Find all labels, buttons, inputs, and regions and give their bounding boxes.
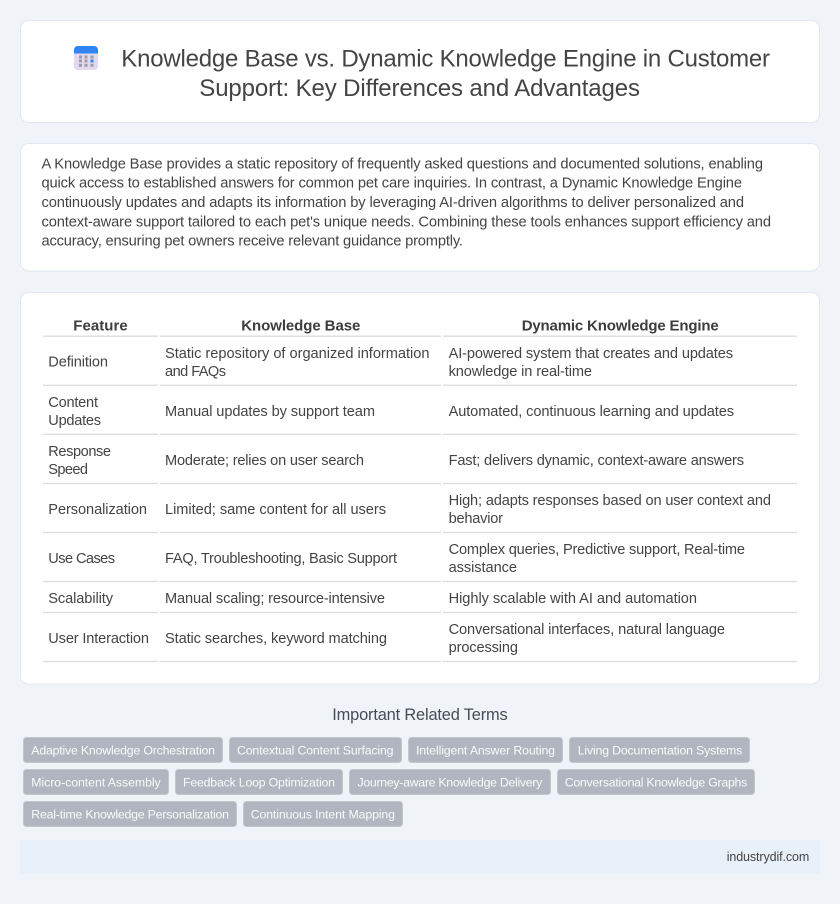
row: response speed: Moderate; relies on user search xyxy=(165,453,364,469)
chip: journey-aware knowledge delivery xyxy=(350,770,550,794)
chip: contextual content surfacing xyxy=(230,738,402,762)
panel: introduction text: context-aware support tailored to each pet's unique needs. Combining these tools enhances support efficiency and xyxy=(42,214,771,230)
title xyxy=(121,46,770,102)
row: personalization: High; adapts responses based on user context and xyxy=(449,493,771,509)
heading: important related terms: Important Related Terms xyxy=(332,706,508,724)
row: user interaction: processing xyxy=(449,640,518,656)
row: user interaction: User Interaction xyxy=(48,631,149,647)
row: use cases: assistance xyxy=(449,560,517,576)
row: content updates: Automated, continuous learning and updates xyxy=(449,404,734,420)
row: definition: and FAQs xyxy=(165,364,226,380)
table header: Dynamic Knowledge Engine xyxy=(522,318,719,335)
panel: introduction text: accuracy, ensuring pet owners receive relevant guidance promptly. xyxy=(42,234,463,250)
chip: real-time knowledge personalization xyxy=(24,802,236,826)
panel: introduction text: continuously updates and adapts its information by leveraging AI-driven algorithms to deliver personalized and xyxy=(42,195,744,211)
row: definition: knowledge in real-time xyxy=(449,364,592,380)
row: user interaction: Static searches, keyword matching xyxy=(165,631,387,647)
row: use cases: Use Cases xyxy=(48,551,115,567)
row: scalability xyxy=(43,591,797,613)
chip: continuous intent mapping: Continuous Intent Mapping xyxy=(251,807,395,821)
icon: calendar xyxy=(74,46,98,70)
chip: conversational knowledge graphs xyxy=(558,770,754,794)
chip: real-time knowledge personalization: Real-time Knowledge Personalization xyxy=(31,807,229,821)
row: scalability: Highly scalable with AI and automation xyxy=(449,591,697,607)
table header: Feature xyxy=(73,318,128,335)
row: content updates: Updates xyxy=(48,413,101,429)
row: personalization: Limited; same content for all users xyxy=(165,502,386,518)
chip: journey-aware knowledge delivery: Journey-aware Knowledge Delivery xyxy=(358,775,543,789)
chip: micro-content assembly xyxy=(24,770,168,794)
row: response speed: Speed xyxy=(48,462,88,478)
chip: living documentation systems xyxy=(570,738,750,762)
row: personalization: behavior xyxy=(449,511,503,527)
chip: intelligent answer routing xyxy=(408,738,562,762)
row: content updates: Manual updates by support team xyxy=(165,404,375,420)
row: personalization xyxy=(43,493,797,533)
title: Support: Key Differences and Advantages xyxy=(199,75,640,102)
row: definition: Definition xyxy=(48,355,108,371)
row: user interaction: Conversational interfaces, natural language xyxy=(449,622,725,638)
panel: introduction text: A Knowledge Base provides a static repository of frequently asked questions and documented solutions, enabling xyxy=(42,156,763,172)
chip: living documentation systems: Living Documentation Systems xyxy=(578,743,742,757)
panel: introduction text xyxy=(20,144,820,271)
row: user interaction xyxy=(43,622,797,662)
chip: intelligent answer routing: Intelligent Answer Routing xyxy=(416,743,555,757)
row: definition: AI-powered system that creates and updates xyxy=(449,346,733,362)
row: content updates: Content xyxy=(48,395,98,411)
row: response speed: Fast; delivers dynamic, context-aware answers xyxy=(449,453,744,469)
chip: contextual content surfacing: Contextual Content Surfacing xyxy=(237,743,394,757)
title: Knowledge Base vs. Dynamic Knowledge Engine in Customer xyxy=(121,46,770,73)
row: use cases: FAQ, Troubleshooting, Basic Support xyxy=(165,551,397,567)
chip: continuous intent mapping xyxy=(244,802,402,826)
chip: micro-content assembly: Micro-content Assembly xyxy=(31,775,162,789)
panel: comparison table xyxy=(20,292,820,684)
row: scalability: Scalability xyxy=(48,591,114,607)
chip: feedback loop optimization: Feedback Loop Optimization xyxy=(183,775,335,789)
row: definition xyxy=(43,346,797,386)
row: use cases xyxy=(43,542,797,582)
row: definition: Static repository of organized information xyxy=(165,346,430,362)
chip: conversational knowledge graphs: Conversational Knowledge Graphs xyxy=(565,775,747,789)
footer: industrydif.com xyxy=(727,850,809,864)
related term chips xyxy=(24,738,754,826)
panel: introduction text: quick access to established answers for common pet care inquiries. In contrast, a Dynamic Knowledge Engine xyxy=(42,176,742,192)
row: scalability: Manual scaling; resource-intensive xyxy=(165,591,385,607)
footer xyxy=(20,840,820,874)
chip: adaptive knowledge orchestration xyxy=(24,738,222,762)
chip: adaptive knowledge orchestration: Adaptive Knowledge Orchestration xyxy=(31,743,215,757)
row: use cases: Complex queries, Predictive support, Real-time xyxy=(449,542,745,558)
row: response speed: Response xyxy=(48,444,111,460)
panel: title header xyxy=(20,20,820,122)
row: personalization: Personalization xyxy=(48,502,147,518)
chip: feedback loop optimization xyxy=(176,770,342,794)
table header xyxy=(43,318,797,337)
row: content updates xyxy=(43,395,797,435)
row: response speed xyxy=(43,444,797,484)
table header: Knowledge Base xyxy=(241,318,360,335)
